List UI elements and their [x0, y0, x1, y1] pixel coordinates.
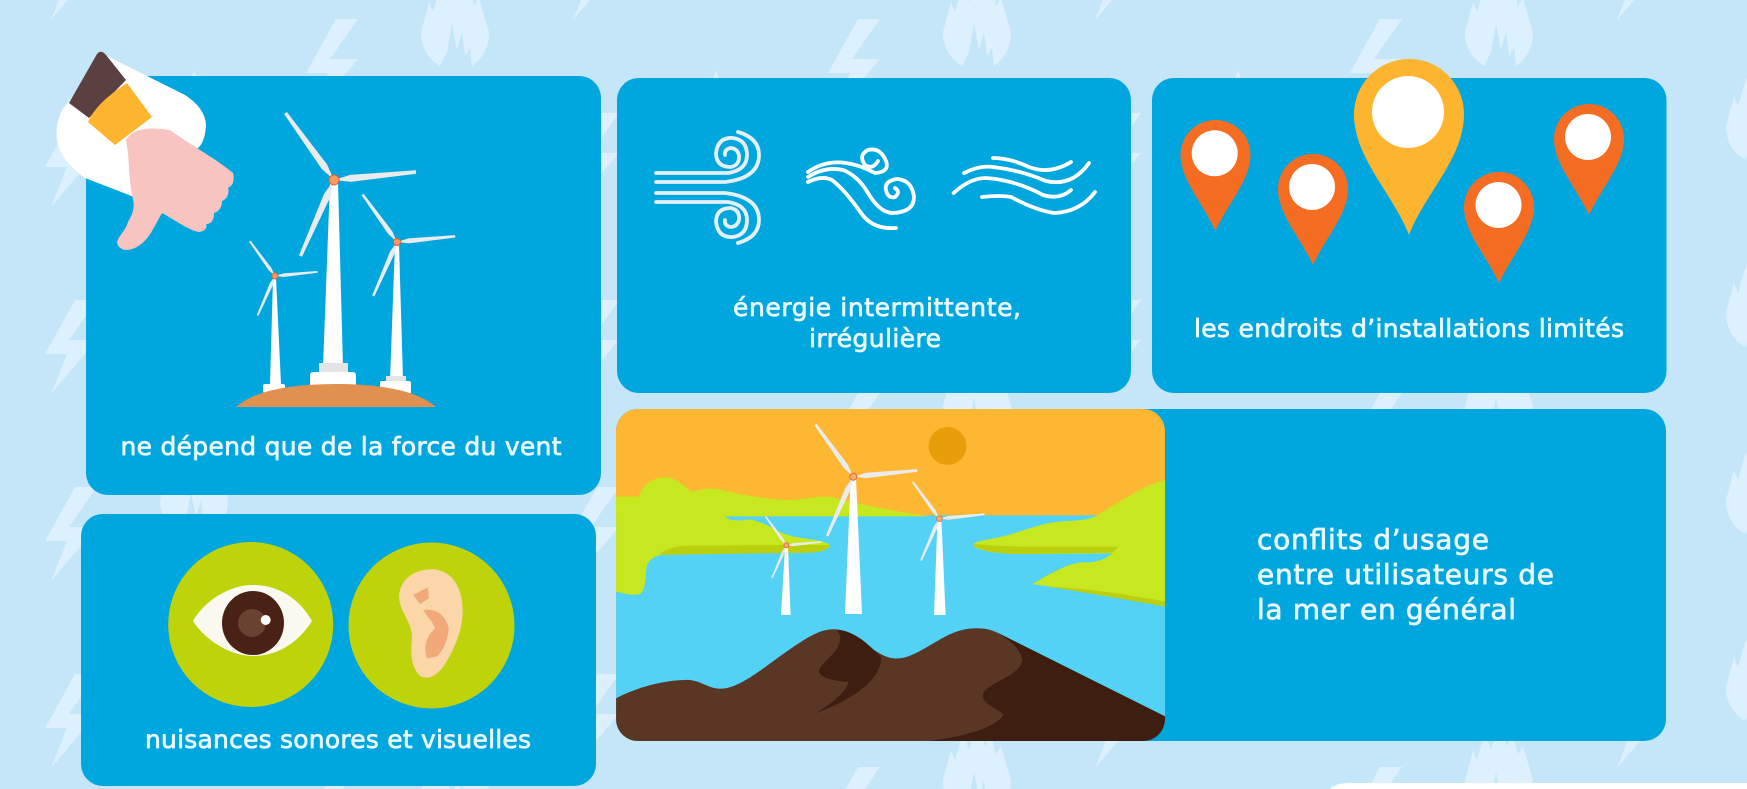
icon: wavy wind lines [954, 158, 1095, 213]
icon: orange map pin 3 [1464, 172, 1534, 283]
panel: force du vent [57, 52, 601, 495]
text: conflits d'usage entre utilisateurs de la mer en général: conflits d’usage [1257, 523, 1489, 556]
text: nuisances sonores et visuelles: nuisances sonores et visuelles [145, 725, 531, 754]
icon: orange map pin 1 [1180, 120, 1250, 231]
text: les endroits d'installations limités: les endroits d’installations limités [1194, 314, 1624, 343]
text: ne dépend que de la force du vent: ne dépend que de la force du vent [120, 432, 562, 461]
text: énergie intermittente, irrégulière: irrégulière [809, 324, 941, 353]
icon: wind turbines on a hill [236, 112, 455, 407]
turbines in the sea [765, 424, 985, 615]
text: conflits d'usage entre utilisateurs de la mer en général [1257, 523, 1554, 626]
text: conflits d'usage entre utilisateurs de la mer en général: entre utilisateurs de [1257, 558, 1554, 591]
icon: orange map pin 2 [1278, 154, 1348, 265]
illustration: sea landscape with offshore wind turbines [616, 409, 1166, 749]
icon: ear in green circle [348, 542, 514, 708]
icon: wind swirl blowing [656, 132, 759, 243]
text: conflits d'usage entre utilisateurs de la mer en général: la mer en général [1257, 593, 1516, 626]
icon: curly gust [808, 149, 914, 228]
icon: sun [928, 427, 966, 465]
icon: orange map pin 4 [1554, 104, 1624, 215]
panel: nuisances sonores et visuelles [81, 514, 596, 786]
mountains in foreground [616, 628, 1166, 743]
icon: yellow map pin [1354, 59, 1464, 235]
text: énergie intermittente, irrégulière: énergie intermittente, [733, 293, 1021, 322]
panel: endroits d'installations limités [1152, 59, 1666, 393]
icon: eye in green circle [168, 542, 333, 707]
text: énergie intermittente, irrégulière [733, 293, 1021, 353]
panel: conflits d'usage [616, 409, 1666, 749]
icon: thumbs down hand [57, 52, 234, 250]
panel: énergie intermittente [617, 78, 1131, 393]
